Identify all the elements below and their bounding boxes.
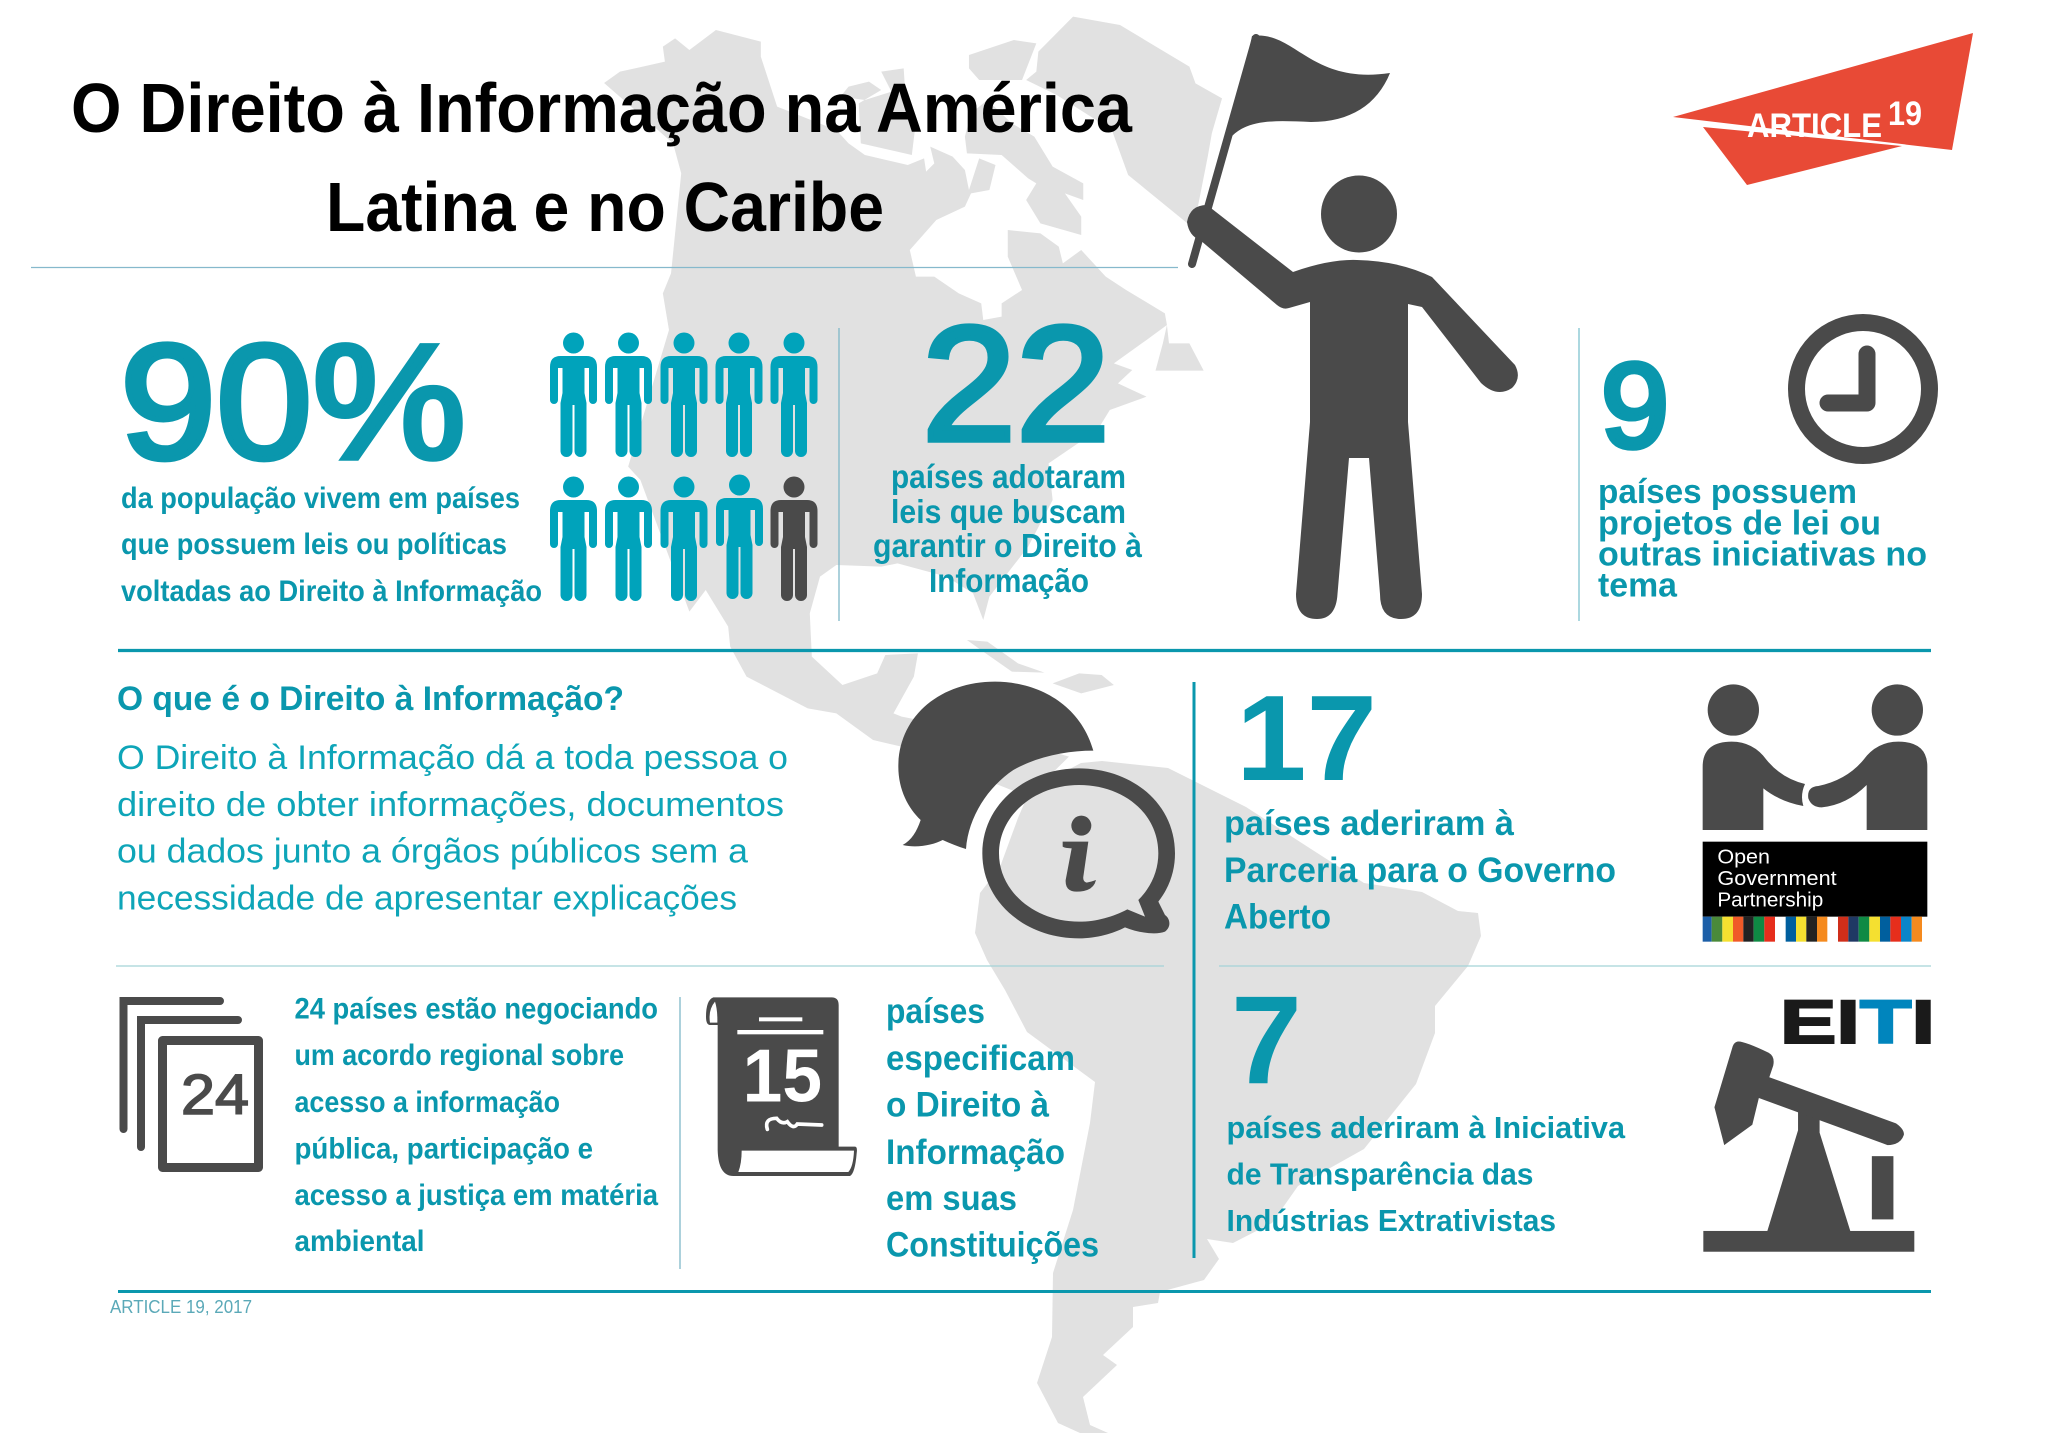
- stat: 17 countries in Open Government Partnership: Parceria para o Governo: [1224, 851, 1616, 890]
- text block: 15 countries constitutions: especificam: [886, 1039, 1075, 1078]
- logo: Open Government Partnership: [1703, 842, 1927, 942]
- stat: 22 countries: 22: [922, 292, 1110, 475]
- logo: ARTICLE 19: [1673, 33, 1973, 185]
- text block: 15 countries constitutions: em suas: [886, 1179, 1017, 1218]
- stat: 7 countries in EITI: Indústrias Extrativistas: [1226, 1203, 1556, 1238]
- text block: 15 countries constitutions: países: [886, 992, 985, 1031]
- stat: 9 countries: países possuem: [1598, 473, 1857, 511]
- stat: 7 countries in EITI: de Transparência das: [1226, 1156, 1534, 1192]
- text block: 24 countries negotiating: [294, 992, 658, 1258]
- text block: 24 countries negotiating: 24 países estão negociando: [294, 992, 658, 1026]
- text block: 15 countries constitutions: o Direito à: [886, 1086, 1050, 1124]
- stat: 90% of population: voltadas ao Direito à Informação: [121, 575, 542, 608]
- title: Latina e no Caribe: [326, 168, 884, 246]
- icon: constitution scroll with 15: [706, 997, 857, 1176]
- stat: 22 countries: garantir o Direito à: [873, 527, 1143, 564]
- stat: 17 countries in Open Government Partnership: 17: [1236, 670, 1377, 806]
- stat: 22 countries: países adotaram: [891, 458, 1126, 495]
- icon: speech bubbles with information sign: [898, 682, 1175, 938]
- text block: 24 countries negotiating: acesso a justiça em matéria: [294, 1179, 658, 1212]
- stat: 9 countries: projetos de lei ou: [1598, 504, 1881, 542]
- stat: 9 countries: 9: [1601, 339, 1669, 473]
- stat: 17 countries in Open Government Partnership: Aberto: [1224, 898, 1331, 936]
- logo: EITI: EI TI: [1780, 988, 1935, 1056]
- icon: constitution scroll with 15: 15: [743, 1034, 822, 1118]
- icon: clock: [1796, 322, 1930, 456]
- text block: what is the right to information: [117, 680, 788, 918]
- icon: people pictogram, nine of ten highlighted: [550, 332, 818, 601]
- text block: 24 countries negotiating: ambiental: [294, 1225, 424, 1258]
- text block: what is the right to information: necessidade de apresentar explicações: [117, 880, 737, 918]
- stat: 9 countries: outras iniciativas no: [1598, 536, 1927, 574]
- logo: Open Government Partnership: Government: [1717, 867, 1837, 890]
- text block: what is the right to information: O que é o Direito à Informação?: [117, 680, 624, 718]
- stat: 22 countries: Informação: [929, 562, 1089, 599]
- title: [71, 69, 1133, 246]
- icon: stacked documents with 24: [124, 1001, 258, 1168]
- stat: 9 countries: [1598, 339, 1927, 604]
- stat: 22 countries: [873, 292, 1143, 599]
- stat: 9 countries: tema: [1598, 566, 1678, 604]
- text block: 24 countries negotiating: acesso a informação: [294, 1086, 560, 1119]
- stat: 17 countries in Open Government Partnership: países aderiram à: [1224, 804, 1515, 843]
- logo: ARTICLE 19: 19: [1888, 95, 1922, 133]
- logo: ARTICLE 19: ARTICLE: [1747, 107, 1882, 145]
- background map: Americas: [604, 17, 1481, 1433]
- text block: 15 countries constitutions: [886, 992, 1099, 1264]
- stat: 7 countries in EITI: [1226, 971, 1626, 1238]
- logo: Open Government Partnership: Partnership: [1717, 889, 1823, 912]
- stat: 90% of population: 90%: [120, 310, 466, 493]
- stat: 7 countries in EITI: países aderiram à Iniciativa: [1226, 1110, 1626, 1145]
- text block: 15 countries constitutions: Informação: [886, 1133, 1065, 1172]
- text block: 24 countries negotiating: pública, participação e: [294, 1132, 593, 1166]
- stat: 17 countries in Open Government Partnership: [1224, 670, 1616, 936]
- icon: stacked documents with 24: 24: [181, 1063, 249, 1127]
- stat: 22 countries: leis que buscam: [891, 493, 1126, 530]
- icon: oil pump: [1703, 1042, 1914, 1252]
- text block: 24 countries negotiating: um acordo regional sobre: [294, 1039, 624, 1072]
- text block: what is the right to information: ou dados junto a órgãos públicos sem a: [117, 832, 748, 870]
- stat: 7 countries in EITI: 7: [1231, 971, 1302, 1110]
- icon: handshake: [1703, 684, 1927, 830]
- stat: 90% of population: da população vivem em países: [121, 482, 520, 515]
- text block: 15 countries constitutions: Constituições: [886, 1226, 1099, 1264]
- source credit: ARTICLE 19, 2017: [110, 1297, 252, 1317]
- icon: person raising a flag: [1187, 36, 1518, 619]
- text block: what is the right to information: direito de obter informações, documentos: [117, 786, 784, 824]
- title: O Direito à Informação na América: [71, 69, 1133, 147]
- stat: 90% of population: [120, 310, 542, 608]
- stat: 90% of population: que possuem leis ou políticas: [121, 528, 507, 561]
- text block: what is the right to information: O Direito à Informação dá a toda pessoa o: [117, 739, 788, 777]
- logo: Open Government Partnership: Open: [1717, 845, 1770, 868]
